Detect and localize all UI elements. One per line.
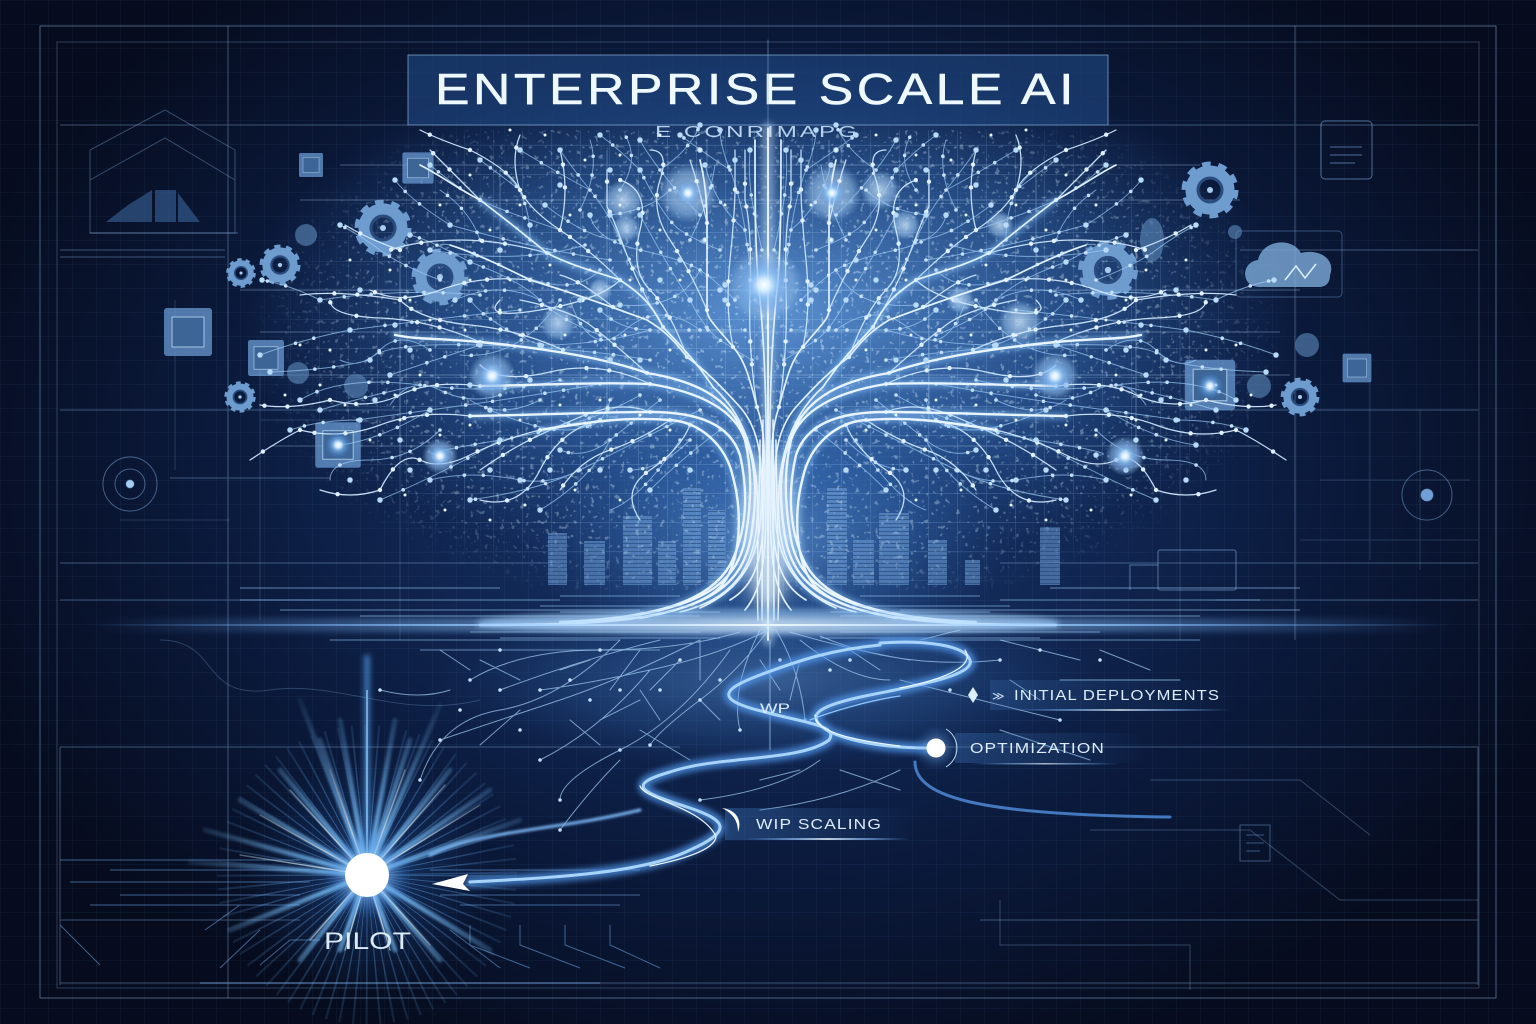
vertical beam above pilot <box>364 655 370 875</box>
root glow below horizon <box>428 590 1108 770</box>
fine background twigs <box>260 125 762 510</box>
dots strung along fine twigs <box>260 125 762 510</box>
node dots <box>260 125 750 510</box>
skyline bars right <box>827 487 1060 585</box>
ground circuit lines around pilot <box>60 860 660 983</box>
ribbon strands <box>470 642 970 882</box>
icon: line chart panel <box>90 190 238 233</box>
upper streak from pilot <box>430 810 640 855</box>
pale canopy blobs <box>422 163 1145 476</box>
arrowhead toward pilot <box>432 874 470 891</box>
label: initial deployments <box>968 680 1240 711</box>
label: optimization <box>913 725 1145 771</box>
limb glow <box>395 200 757 625</box>
canopy circuit lines <box>240 140 1300 480</box>
trunk glow <box>528 410 1008 670</box>
tree: right half (mirror) <box>770 125 1286 625</box>
label: initial deployments: INITIAL DEPLOYMENTS <box>1014 687 1220 704</box>
canopy glow <box>238 45 1298 575</box>
dots strung along bright twigs <box>250 130 757 520</box>
horizon light line <box>90 609 1450 635</box>
ribbon glow <box>470 642 970 882</box>
title panel <box>408 55 1108 125</box>
icon: document <box>1321 121 1372 179</box>
label: wp: WP <box>760 700 790 716</box>
small sparks <box>285 130 725 520</box>
label: wip scaling <box>722 808 915 840</box>
label: wip scaling: WIP SCALING <box>756 816 882 833</box>
canopy bright grid <box>266 130 1271 610</box>
tree: left half <box>250 125 766 625</box>
label: pilot: PILOT <box>324 928 411 955</box>
icon: target right <box>1402 470 1452 520</box>
icon: gears <box>227 166 1316 413</box>
icon: cloud <box>1236 231 1342 297</box>
speckled particle cloud <box>230 130 1306 590</box>
icon: chips <box>164 152 1371 468</box>
ground streaks <box>240 588 1300 650</box>
label: optimization: OPTIMIZATION <box>970 740 1105 757</box>
glowing nodes <box>324 179 1224 472</box>
roadmap ribbon <box>430 642 1170 882</box>
icon: data blobs <box>287 218 1319 398</box>
branch curve below optimization <box>915 762 1170 817</box>
subtitle: E CONRIMAPG <box>655 124 860 141</box>
trunk centre beam <box>744 40 792 640</box>
main limbs <box>395 335 755 625</box>
brighter twigs <box>250 130 757 520</box>
icon: small panel right <box>1130 550 1236 590</box>
title: ENTERPRISE SCALE AI <box>435 65 1077 114</box>
pilot glow <box>247 755 487 995</box>
icon: small document bottom right <box>1240 825 1270 861</box>
root network below horizon <box>380 630 1180 830</box>
burst rays <box>190 700 520 960</box>
icon: target left <box>103 457 157 511</box>
skyline bars left <box>548 487 725 585</box>
pilot starburst <box>190 700 520 960</box>
label: initial deployments: ≫ <box>992 689 1005 703</box>
upper limbs <box>420 140 766 612</box>
